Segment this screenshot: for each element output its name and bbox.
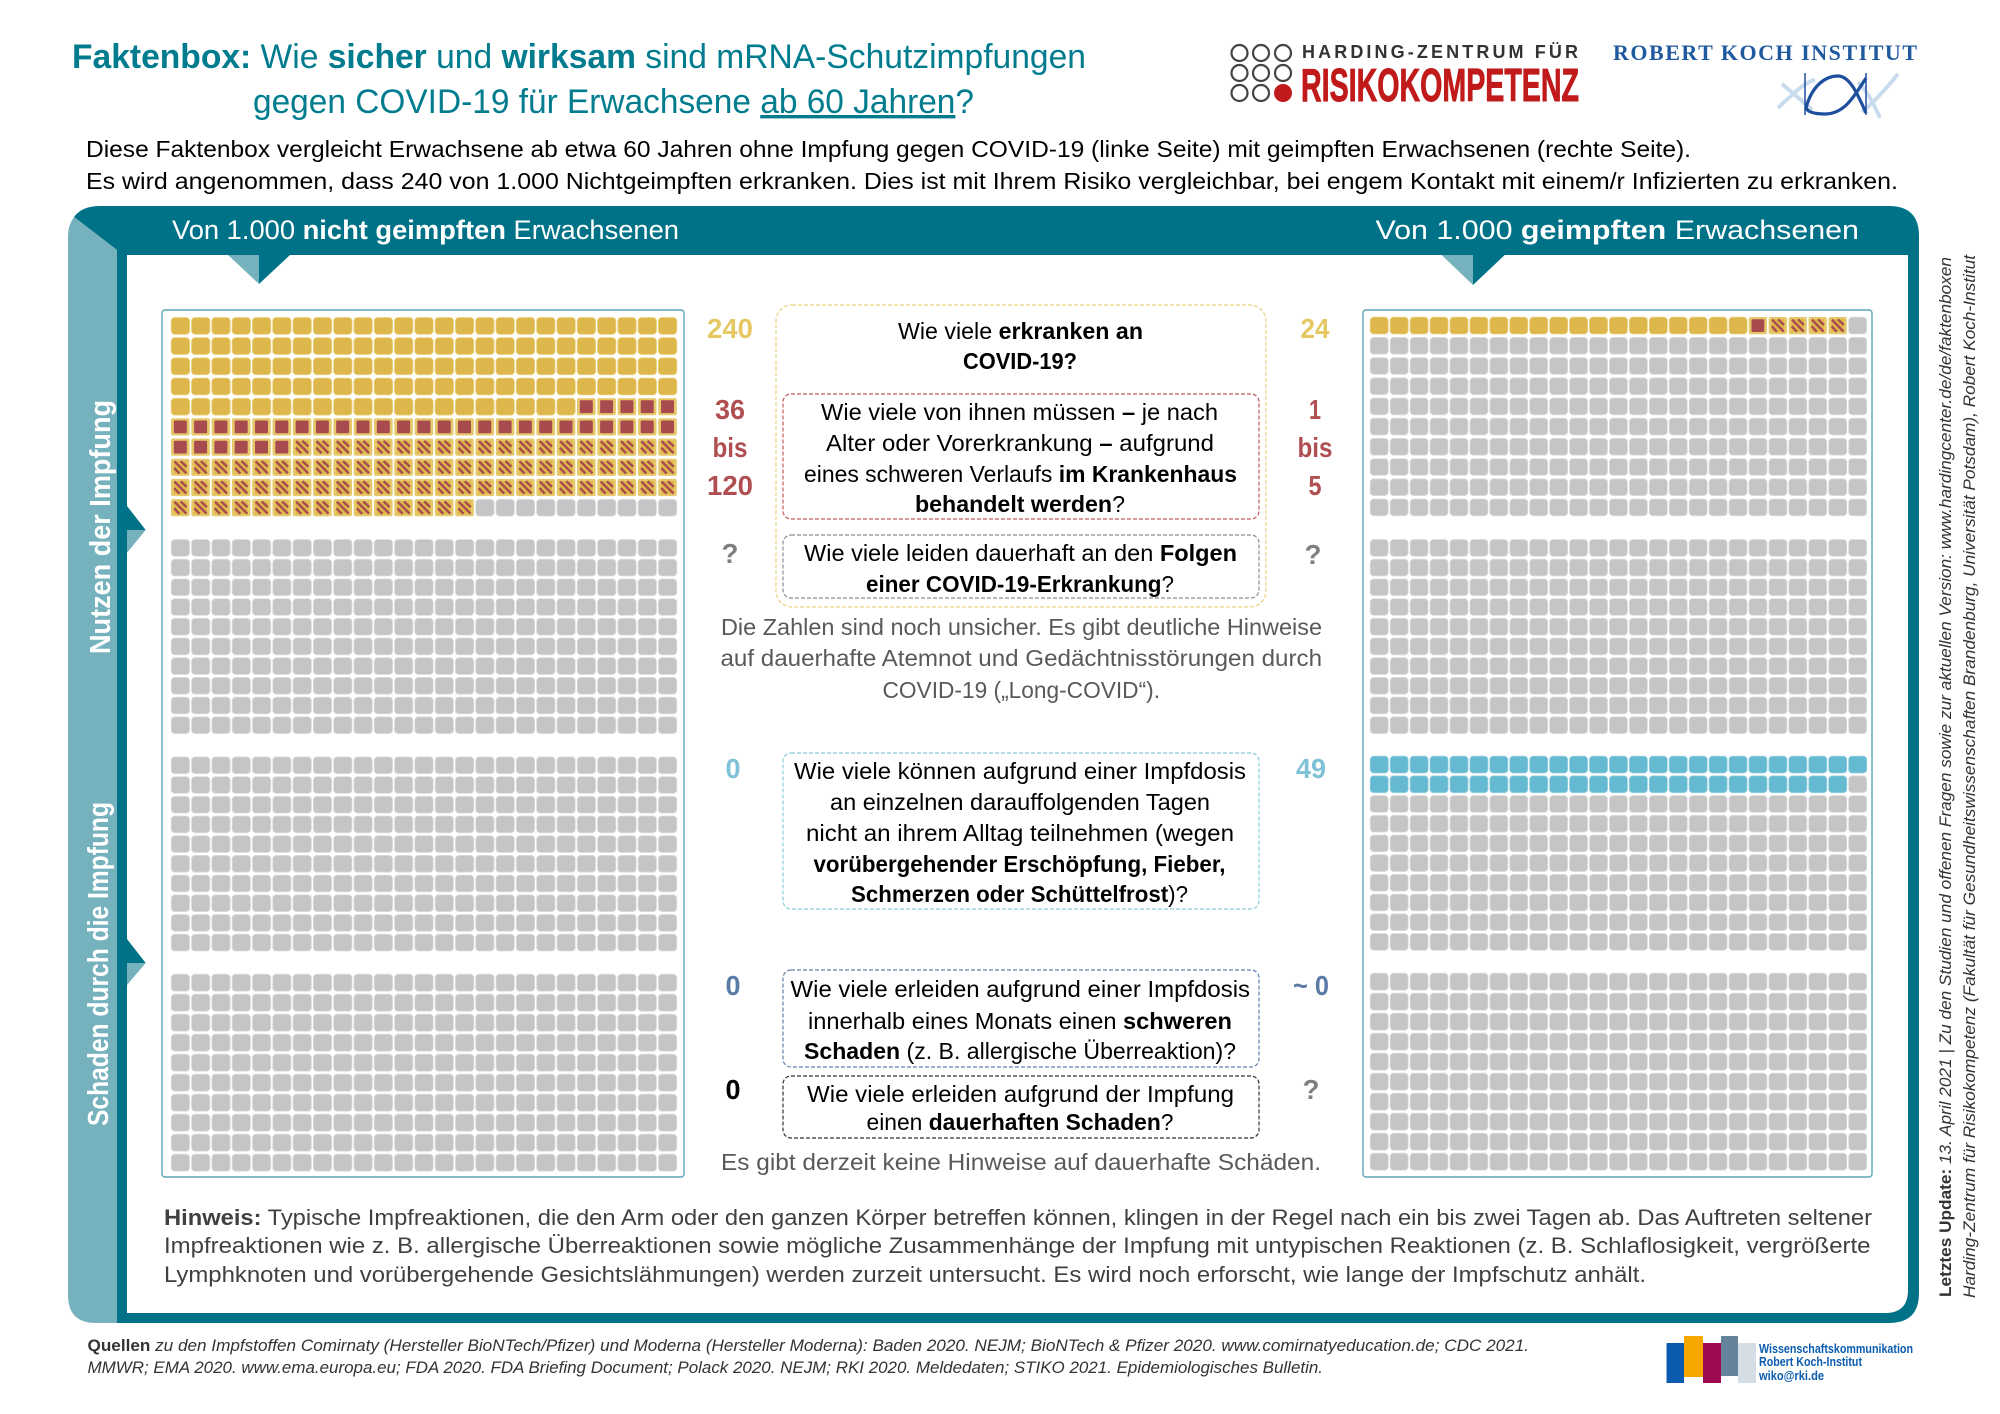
- notch arrow: right column: [1442, 255, 1505, 285]
- icons: long-term consequences, left: [171, 540, 677, 734]
- numbers: right column: 1: [1309, 394, 1321, 425]
- column heading: unvaccinated: Von 1.000 nicht geimpften Erwachsenen: [172, 215, 679, 245]
- numbers: left column: [707, 313, 753, 1105]
- icons: long-term harm, left: [171, 974, 677, 1171]
- question box: schwerer Schaden: Wie viele erleiden aufgrund einer Impfdosis: [790, 976, 1250, 1002]
- notch arrow: left column: [228, 255, 290, 284]
- question box: Krankenhaus: Wie viele von ihnen müssen – je nach: [821, 399, 1218, 425]
- note: Long-COVID: Die Zahlen sind noch unsicher. Es gibt deutliche Hinweise: [721, 614, 1322, 640]
- intro text: [86, 136, 1898, 194]
- question: erkranken: Wie viele erkranken an: [898, 318, 1143, 344]
- question box: Krankenhaus: Alter oder Vorerkrankung – aufgrund: [826, 430, 1214, 456]
- icons: short-term side effects, left: [171, 757, 677, 951]
- question box: Alltag: [783, 753, 1259, 909]
- intro text: Diese Faktenbox vergleicht Erwachsene ab etwa 60 Jahren ohne Impfung gegen COVID-19 (linke Seite) mit geimpften Erwachsenen (rechte Seite).: [86, 136, 1691, 162]
- note: Hinweis: Hinweis: Typische Impfreaktionen, die den Arm oder den ganzen Körper betreffen können, klingen in der Regel nach ein bis zwei Tagen ab. Das Auftreten seltener: [164, 1205, 1873, 1230]
- icons: serious and long-term harm, right: [1370, 973, 1867, 1170]
- question box: schwerer Schaden: Schaden (z. B. allergische Überreaktion)?: [804, 1038, 1236, 1064]
- question box: dauerhafter Schaden: Wie viele erleiden aufgrund der Impfung: [807, 1081, 1234, 1107]
- numbers: left column: 120: [707, 470, 753, 501]
- panel: right icon array (vaccinated): [1363, 310, 1872, 1177]
- side note: update and credits: Harding-Zentrum für Risikokompetenz (Fakultät für Gesundheitswissenschaften Brandenburg, Universität Potsdam), Robert Koch-Institut: [1961, 254, 1979, 1298]
- numbers: right column: 5: [1308, 470, 1322, 501]
- logo: Harding-Zentrum für Risikokompetenz: [1232, 42, 1579, 111]
- logo: Wissenschaftskommunikation RKI: Robert Koch-Institut: [1759, 1355, 1863, 1369]
- numbers: right column: bis: [1298, 432, 1332, 463]
- question box: Alltag: Schmerzen oder Schüttelfrost)?: [851, 881, 1188, 907]
- logo: Robert Koch Institut: ROBERT KOCH INSTITUT: [1613, 40, 1917, 65]
- sources: MMWR; EMA 2020. www.ema.europa.eu; FDA 2020. FDA Briefing Document; Polack 2020. NEJM; RKI 2020. Meldedaten; STIKO 2021. Epidemiologisches Bulletin.: [88, 1358, 1323, 1377]
- question box: Krankenhaus: [783, 394, 1259, 519]
- side note: update and credits: [1937, 254, 1979, 1298]
- numbers: left column: 240: [707, 313, 753, 344]
- intro text: Es wird angenommen, dass 240 von 1.000 Nichtgeimpften erkranken. Dies ist mit Ihrem Risiko vergleichbar, bei engem Kontakt mit einem/r Infizierten zu erkranken.: [86, 168, 1898, 194]
- note: Long-COVID: [720, 614, 1322, 703]
- title: gegen COVID-19 für Erwachsene ab 60 Jahren?: [253, 83, 974, 121]
- numbers: left column: 0: [726, 753, 740, 784]
- logo: Wissenschaftskommunikation RKI: [1666, 1336, 1913, 1383]
- note: Long-COVID: auf dauerhafte Atemnot und Gedächtnisstörungen durch: [720, 645, 1322, 671]
- question box: dauerhafter Schaden: einen dauerhaften Schaden?: [866, 1109, 1174, 1135]
- icons: long-term consequences, right: [1370, 540, 1867, 734]
- title: Faktenbox: Wie sicher und wirksam sind mRNA-Schutzimpfungen: [72, 38, 1086, 76]
- icons: getting ill and hospitalised, left: [171, 318, 677, 516]
- panel: left icon array (unvaccinated): [162, 310, 684, 1177]
- note: Hinweis: Lymphknoten und vorübergehende Gesichtslähmungen) werden zurzeit untersucht. Es wird noch erforscht, wie lange der Impfschutz anhält.: [164, 1262, 1646, 1287]
- title: [72, 38, 1086, 121]
- side note: update and credits: Letztes Update: 13. April 2021 | Zu den Studien und offenen Fragen sowie zur aktuellen Version: www.hardingcenter.de/de/faktenboxen: [1937, 257, 1955, 1297]
- numbers: left column: bis: [712, 432, 748, 463]
- arrow: Schaden section: [127, 939, 146, 985]
- question box: Krankenhaus: eines schweren Verlaufs im Krankenhaus: [804, 461, 1237, 487]
- numbers: left column: 0: [726, 1074, 740, 1105]
- arrow: Nutzen section: [127, 506, 146, 553]
- logo: Robert Koch Institut: [1613, 40, 1917, 118]
- numbers: left column: 36: [715, 394, 745, 425]
- icons: short-term side effects, right: [1370, 756, 1867, 950]
- question box: Alltag: nicht an ihrem Alltag teilnehmen (wegen: [806, 820, 1234, 846]
- numbers: right column: ?: [1303, 1074, 1319, 1105]
- question box: Folgen: einer COVID-19-Erkrankung?: [866, 571, 1174, 597]
- question box: dauerhafter Schaden: [783, 1076, 1259, 1138]
- numbers: right column: [1293, 313, 1332, 1105]
- side label: Schaden durch die Impfung: Schaden durch die Impfung: [83, 802, 115, 1126]
- numbers: left column: 0: [726, 970, 740, 1001]
- question box: schwerer Schaden: [783, 970, 1259, 1067]
- numbers: right column: 49: [1296, 753, 1326, 784]
- logo: Harding-Zentrum für Risikokompetenz: RISIKOKOMPETENZ: [1301, 59, 1579, 111]
- question box: Alltag: vorübergehender Erschöpfung, Fieber,: [814, 851, 1226, 877]
- question: erkranken: [898, 318, 1143, 374]
- side label: Nutzen der Impfung: Nutzen der Impfung: [85, 400, 117, 654]
- icons: getting ill and hospitalised, right: [1370, 317, 1867, 516]
- question box: Alltag: an einzelnen darauffolgenden Tagen: [830, 789, 1210, 815]
- logo: Harding-Zentrum für Risikokompetenz: HARDING-ZENTRUM FÜR: [1302, 42, 1578, 62]
- numbers: right column: ~ 0: [1293, 970, 1329, 1001]
- column heading: vaccinated: Von 1.000 geimpften Erwachsenen: [1376, 215, 1859, 245]
- logo: Wissenschaftskommunikation RKI: wiko@rki.de: [1758, 1369, 1824, 1383]
- note: Hinweis: [164, 1205, 1873, 1287]
- question box: Alltag: Wie viele können aufgrund einer Impfdosis: [794, 758, 1246, 784]
- sources: [88, 1336, 1529, 1377]
- note: Hinweis: Impfreaktionen wie z. B. allergische Überreaktionen sowie mögliche Zusammenhänge der Impfung mit untypischen Reaktionen (z. B. Schlaflosigkeit, vergrößerte: [164, 1233, 1871, 1258]
- question box: Krankenhaus: behandelt werden?: [915, 491, 1125, 517]
- question box: schwerer Schaden: innerhalb eines Monats einen schweren: [808, 1008, 1232, 1034]
- numbers: right column: ?: [1305, 539, 1321, 570]
- sources: Quellen zu den Impfstoffen Comirnaty (Hersteller BioNTech/Pfizer) und Moderna (Hersteller Moderna): Baden 2020. NEJM; BioNTech & Pfizer 2020. www.comirnatyeducation.de; CDC 2021.: [88, 1336, 1529, 1355]
- logo: Wissenschaftskommunikation RKI: Wissenschaftskommunikation: [1759, 1342, 1913, 1356]
- question box: Folgen: Wie viele leiden dauerhaft an den Folgen: [804, 540, 1237, 566]
- numbers: right column: 24: [1300, 313, 1330, 344]
- note: Long-COVID: COVID-19 („Long-COVID“).: [882, 677, 1160, 703]
- question: erkranken: COVID-19?: [963, 348, 1077, 374]
- question box: Folgen: [783, 535, 1259, 598]
- question group box: erkranken: [776, 305, 1266, 607]
- main frame: [68, 206, 1919, 1323]
- note: keine dauerhaften Schäden: Es gibt derzeit keine Hinweise auf dauerhafte Schäden.: [721, 1149, 1321, 1175]
- numbers: left column: ?: [722, 538, 738, 569]
